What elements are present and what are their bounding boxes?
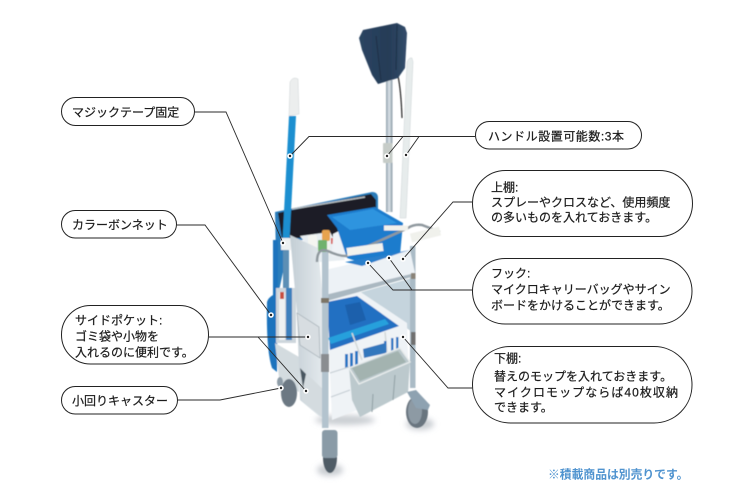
callout: サイドポケット [62,306,208,364]
caster left [277,377,297,407]
icon: white handle [400,58,413,218]
callout: フック: ボードをかけることができます。 [491,298,670,312]
callout: カラーボンネット: カラーボンネット [72,218,168,232]
callout: マジックテープ固定: マジックテープ固定 [72,106,179,120]
icon: navy head cover on silver handle [359,23,407,212]
rear panel and tools on side [275,238,299,392]
icon: blue handle [282,78,299,250]
side panel [290,235,325,421]
callout: 小回りキャスター [62,386,178,414]
callout: ハンドル設置可能数 [476,122,642,149]
callout: 上棚: 上棚: [491,180,518,194]
front net basket [349,348,410,417]
shelf rail with hook bar [317,225,440,262]
callout: 上棚: の多いものを入れておきます。 [491,210,657,224]
callout: カラーボンネット [62,210,176,238]
lower shelf crate with blue mops [327,291,409,420]
callout: フック [472,258,692,324]
lower side pocket [300,368,325,420]
callout: サイドポケット: ゴミ袋や小物を [75,328,159,344]
callout: 下棚: できます。 [494,400,553,414]
callout: フック: フック: [491,266,530,280]
callout: サイドポケット: 入れるのに便利です。 [75,346,194,360]
upper shelf tray [325,250,415,301]
cart illustration [267,23,440,476]
shelf bottles [300,228,347,262]
caster front [322,430,338,473]
callout: マジックテープ固定 [62,98,194,126]
upper side pocket [297,313,320,358]
callout: 下棚: 替えのモップを入れておきます。 [494,370,672,384]
caster right [406,390,430,428]
floor shadows [315,415,434,476]
callout: 下棚: マイクロモップならば40枚収納 [494,384,678,400]
black board behind top shelf [275,192,378,300]
leader end dots [269,153,408,393]
callout: サイドポケット: サイドポケット: [75,314,162,328]
leader lines [177,112,475,400]
callout: 下棚 [472,346,692,423]
front post [321,252,416,428]
blue color bonnet at side [267,240,278,372]
callout: ハンドル設置可能数: ハンドル設置可能数:3本 [488,128,624,144]
callout: 小回りキャスター: 小回りキャスター [72,394,168,408]
blue bucket [327,207,403,263]
callout: 下棚: 下棚: [494,350,521,366]
callout: 上棚: スプレーやクロスなど、使用頻度 [491,194,670,210]
right post [410,246,416,388]
rear back panel between posts [358,278,412,332]
callout: フック: マイクロキャリーバッグやサイン [491,282,671,296]
callout: 上棚 [472,170,692,236]
note: items sold separately: ※積載商品は別売りです。 [548,468,688,482]
